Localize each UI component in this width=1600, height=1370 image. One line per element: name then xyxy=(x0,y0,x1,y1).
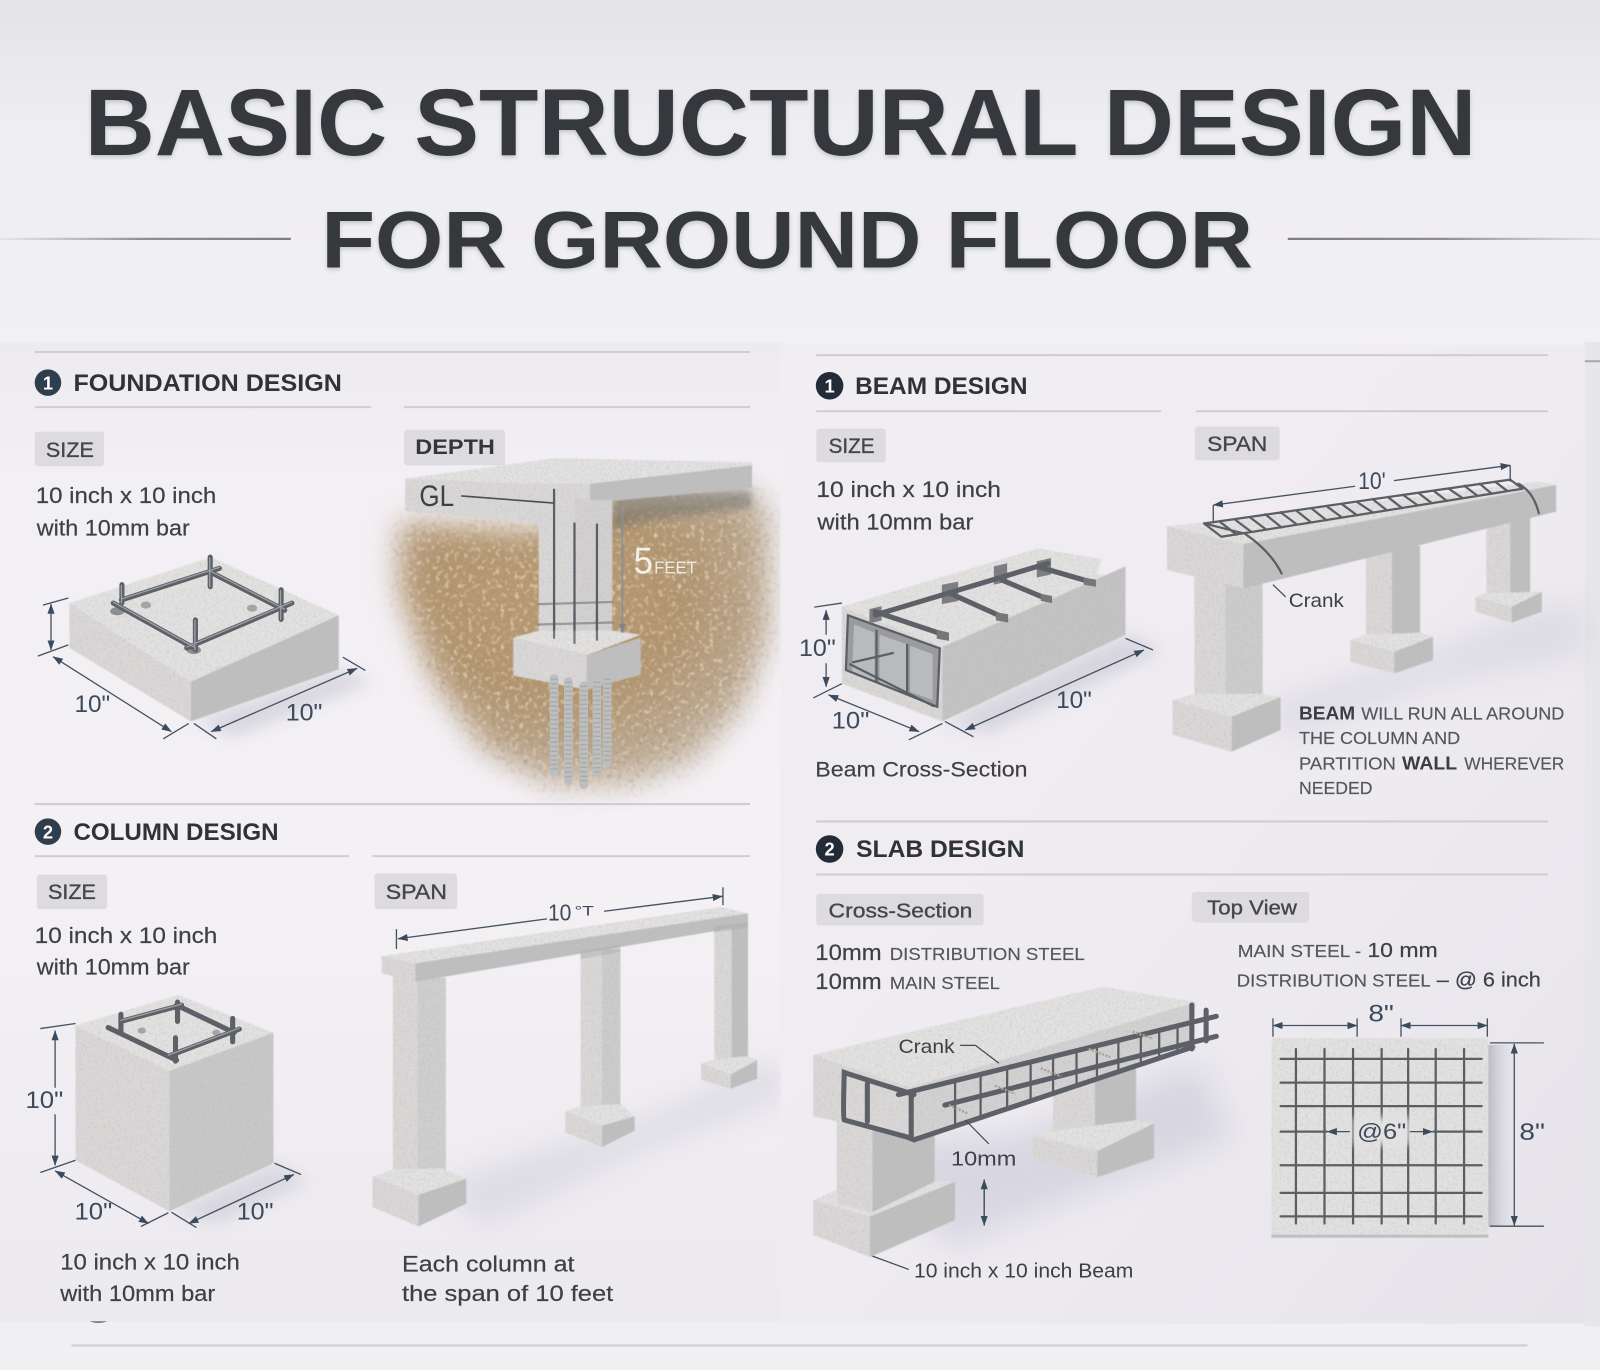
dimensions: beam section: 10" xyxy=(1056,687,1092,714)
panel: foundation and column xyxy=(0,342,784,1321)
heading: beam design: BEAM DESIGN xyxy=(855,373,1028,400)
title: FOR GROUND FLOOR xyxy=(321,195,1253,285)
beam xyxy=(1167,482,1556,544)
text: beam note: THE COLUMN AND xyxy=(1299,728,1460,748)
column bars xyxy=(554,490,597,643)
heading: slab design: SLAB DESIGN xyxy=(856,836,1024,863)
icon: number 1 xyxy=(35,369,61,396)
section: column design xyxy=(26,804,784,1306)
text: beam size: with 10mm bar xyxy=(816,510,974,535)
middle column xyxy=(1366,551,1392,643)
footing pad xyxy=(513,631,641,690)
dimension: 10 ft: °T xyxy=(574,903,594,919)
dimensions: footing: 10" xyxy=(286,699,322,726)
tag: size xyxy=(816,429,886,462)
dimensions: column: 10" xyxy=(26,1087,63,1114)
icon: number 2: 2 xyxy=(43,821,53,842)
text: foundation size xyxy=(36,483,216,541)
slab xyxy=(405,458,752,640)
tag: top view xyxy=(1192,892,1309,922)
near column xyxy=(837,1117,872,1212)
text: beam note xyxy=(1299,702,1564,798)
text: beam note: PARTITION xyxy=(1299,753,1396,773)
heading: column design: COLUMN DESIGN xyxy=(73,819,279,846)
panel: right strip behind panels xyxy=(1585,342,1600,1327)
label: beam size xyxy=(872,1256,1133,1283)
tag: size: SIZE xyxy=(48,880,96,904)
rebar: column cage xyxy=(108,1002,239,1061)
text: column note: 10 inch x 10 inch xyxy=(60,1249,240,1274)
icon: number 2 xyxy=(35,818,61,845)
label: 10mm xyxy=(951,1120,1016,1226)
diagram: slab top view xyxy=(1271,1000,1545,1238)
tag: cross-section xyxy=(816,894,984,926)
dimensions: footing: 10" xyxy=(74,691,110,718)
near column xyxy=(393,974,417,1184)
text: cross-section steel: 10mm xyxy=(815,969,882,994)
icon: number 2: 2 xyxy=(824,839,835,860)
text: beam cross-section caption: Beam Cross-Section xyxy=(815,758,1028,782)
text: cross-section steel xyxy=(815,940,1085,994)
diagram: slab cross-section xyxy=(813,987,1235,1283)
label: spacing: @6" xyxy=(1357,1119,1406,1144)
tag: span xyxy=(374,873,457,909)
text: column size: with 10mm bar xyxy=(36,954,190,979)
icon: number 1: 1 xyxy=(824,375,835,396)
text: beam note: WALL xyxy=(1402,752,1457,773)
dimension: 10 ft: 10' xyxy=(1358,468,1386,495)
dimensions: footing xyxy=(38,598,365,739)
rebar cage xyxy=(844,1005,1216,1140)
beam xyxy=(382,907,748,963)
tag: span: SPAN xyxy=(386,880,447,904)
rebar: beam top xyxy=(869,558,1096,641)
text: column size xyxy=(35,923,217,979)
dimension: 10 ft xyxy=(1213,465,1510,521)
dimension: width xyxy=(1273,1000,1487,1037)
rods below footing xyxy=(554,679,607,785)
label: beam size: 10 inch x 10 inch Beam xyxy=(914,1261,1133,1283)
dimensions: beam section: 10" xyxy=(799,635,836,662)
section: foundation design xyxy=(35,352,767,785)
text: cross-section steel: 10mm xyxy=(815,940,882,965)
text: top-view steel: 10 mm xyxy=(1367,940,1438,962)
label: 10mm: 10mm xyxy=(951,1148,1016,1170)
text: beam size xyxy=(816,477,1001,535)
crank bars xyxy=(1204,484,1539,573)
far column xyxy=(1486,515,1510,597)
text: cross-section steel: MAIN STEEL xyxy=(890,973,1000,993)
near column xyxy=(1194,571,1226,709)
text: beam size: 10 inch x 10 inch xyxy=(816,477,1001,502)
shadows xyxy=(446,1061,784,1224)
text: top-view steel: MAIN STEEL - xyxy=(1238,941,1361,961)
text: foundation size: 10 inch x 10 inch xyxy=(36,483,216,508)
tag: top view: Top View xyxy=(1207,897,1297,919)
diagram: depth section in soil xyxy=(400,458,767,785)
dimension: height xyxy=(1490,1043,1545,1226)
text: column note xyxy=(59,1249,240,1306)
tag: size xyxy=(37,874,107,909)
tag: cross-section: Cross-Section xyxy=(829,900,972,922)
dimension: 10 ft: 10 xyxy=(548,899,571,925)
bottom rule xyxy=(71,1320,1528,1346)
soil mass xyxy=(400,492,767,784)
text: cross-section steel: DISTRIBUTION STEEL xyxy=(890,944,1085,964)
tag: size xyxy=(35,432,104,466)
text: top-view steel: – @ 6 inch xyxy=(1437,970,1541,992)
depth arrow and label: 5 feet: FEET xyxy=(654,557,697,577)
diagram: beam cross-section xyxy=(799,548,1163,740)
diagram: beam span xyxy=(1167,465,1585,752)
tag: span: SPAN xyxy=(1207,432,1267,456)
label: crank xyxy=(1273,585,1344,612)
far column xyxy=(714,922,732,1060)
label: GL xyxy=(419,480,554,513)
recess xyxy=(846,615,940,707)
heading: foundation design: FOUNDATION DESIGN xyxy=(73,370,342,397)
rebar ladder xyxy=(1204,480,1539,573)
text: top-view steel: DISTRIBUTION STEEL xyxy=(1237,971,1431,991)
distribution bars xyxy=(949,1032,1153,1113)
diagram: footing block xyxy=(38,557,373,739)
icon: number 1 xyxy=(816,372,843,399)
text: beam note: NEEDED xyxy=(1299,778,1372,798)
title: BASIC STRUCTURAL DESIGN xyxy=(85,70,1477,176)
text: column size: 10 inch x 10 inch xyxy=(35,923,217,948)
depth arrow and label: 5 feet: 5 xyxy=(634,540,653,581)
dimension: 10 ft xyxy=(396,887,723,949)
icon: number 2 xyxy=(816,835,843,863)
section: beam design xyxy=(799,355,1585,798)
label: crank: Crank xyxy=(898,1036,955,1058)
panel: beam and slab xyxy=(781,345,1585,1323)
rebar mesh xyxy=(1281,1049,1482,1223)
slab top and faces xyxy=(813,987,1196,1087)
far column xyxy=(1053,1082,1095,1148)
text: span note: the span of 10 feet xyxy=(402,1281,614,1306)
rebar: footing cage xyxy=(110,557,292,654)
tag: depth xyxy=(404,430,505,465)
section: slab design xyxy=(813,821,1548,1283)
text: column note: with 10mm bar xyxy=(59,1281,216,1306)
text: span note: Each column at xyxy=(402,1251,575,1276)
label: crank: Crank xyxy=(1289,590,1344,612)
text: span note xyxy=(402,1251,614,1306)
dimension: height: 8" xyxy=(1519,1119,1545,1146)
dimensions: column: 10" xyxy=(237,1198,273,1225)
diagram: column block xyxy=(26,995,310,1228)
tag: size: SIZE xyxy=(829,434,874,458)
text: beam note: BEAM xyxy=(1299,702,1355,723)
dimensions: beam section xyxy=(799,603,1153,740)
tag: size: SIZE xyxy=(46,438,94,462)
dimensions: column xyxy=(26,1023,301,1228)
text: beam note: WHEREVER xyxy=(1464,753,1564,773)
middle column xyxy=(581,949,602,1122)
tag: span xyxy=(1195,427,1280,460)
text: top-view steel xyxy=(1237,940,1541,992)
label: GL: GL xyxy=(419,480,454,513)
label: crank xyxy=(898,1036,999,1063)
dimensions: beam section: 10" xyxy=(832,708,869,735)
depth arrow and label: 5 feet xyxy=(622,510,697,633)
text: foundation size: with 10mm bar xyxy=(36,516,190,541)
tag: depth: DEPTH xyxy=(415,435,495,459)
icon: number 1: 1 xyxy=(43,372,53,393)
title xyxy=(0,70,1600,285)
dimensions: column: 10" xyxy=(74,1198,112,1225)
diagram: column span frame xyxy=(372,887,784,1227)
text: beam note: WILL RUN ALL AROUND xyxy=(1361,703,1564,723)
dimension: width: 8" xyxy=(1368,1000,1394,1027)
label: spacing xyxy=(1327,1119,1433,1144)
